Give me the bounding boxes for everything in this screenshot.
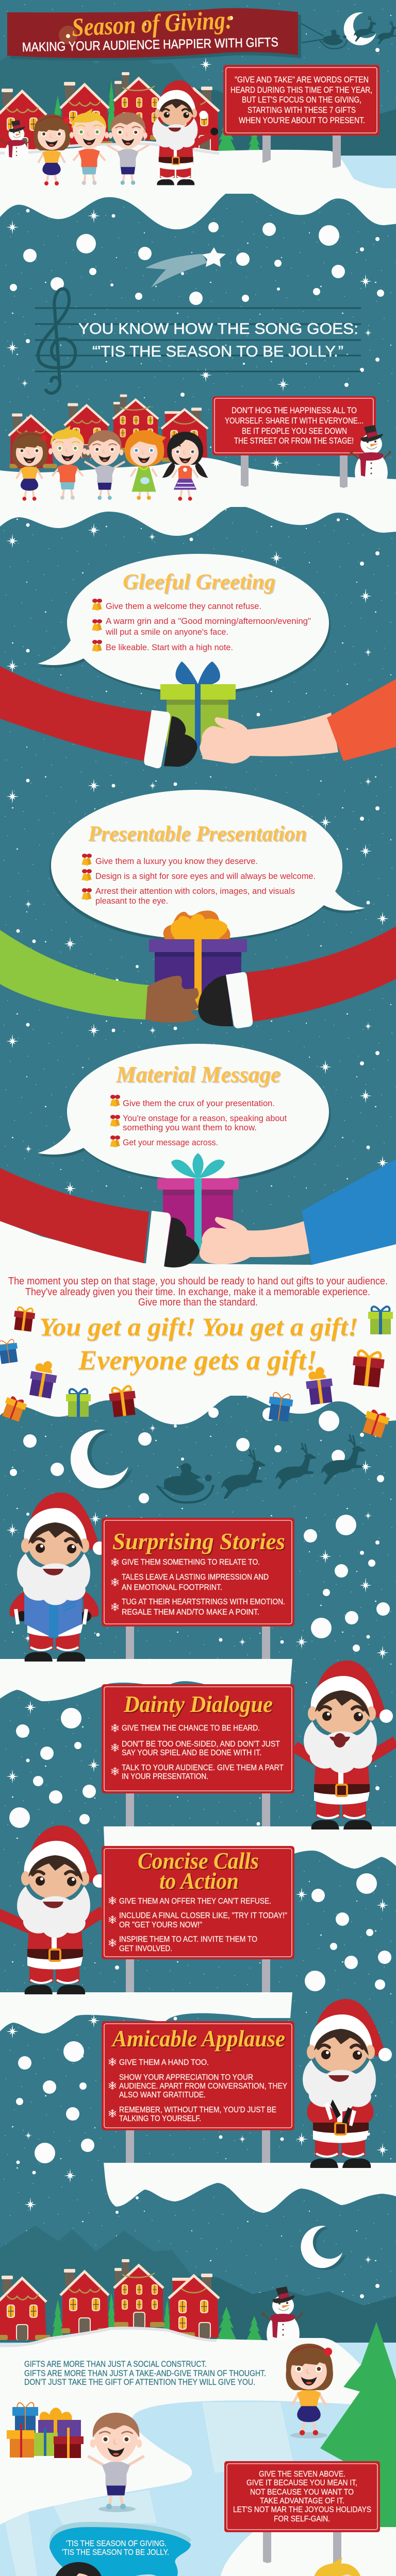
character: santa presenting sign — [0, 1825, 106, 1994]
bullet list: pleasant to the eye. — [95, 896, 168, 906]
heading: song quote: “'TIS THE SEASON TO BE JOLLY.” — [92, 343, 343, 360]
bullet list: will put a smile on anyone's face. — [105, 627, 228, 637]
sign text: "GIVE AND TAKE" ARE WORDS OFTEN — [235, 75, 369, 84]
bullet list — [109, 1896, 287, 1953]
sign text — [230, 75, 372, 125]
character: skating boy — [88, 2413, 144, 2512]
bullet list — [110, 1095, 287, 1147]
bullet list: GIVE THEM THE CHANCE TO BE HEARD. — [122, 1724, 260, 1733]
subtitle: MAKING YOUR AUDIENCE HAPPIER WITH GIFTS — [22, 35, 278, 55]
snowy ground — [0, 141, 396, 194]
mountains — [0, 2226, 396, 2344]
snow field — [0, 2327, 396, 2524]
icon: trees — [50, 80, 262, 155]
bullet list: TALK TO YOUR AUDIENCE. GIVE THEM A PART — [122, 1764, 284, 1772]
bullet list: Get your message across. — [123, 1138, 218, 1147]
text block: gifts are more: DON'T JUST TAKE THE GIFT OF ATTENTION THEY WILL GIVE YOU. — [24, 2377, 255, 2387]
icon: snowman — [261, 2286, 303, 2341]
heading: Presentable Presentation — [88, 822, 307, 846]
title: Season of Giving: Season of Giving: — [71, 5, 233, 42]
icon: trees — [51, 2293, 262, 2344]
heading: to Action — [159, 1868, 239, 1894]
bullet list: TUG AT THEIR HEARTSTRINGS WITH EMOTION. — [122, 1598, 285, 1606]
snow field — [0, 1221, 396, 1396]
signpost: give the seven above: TAKE ADVANTAGE OF IT. — [260, 2497, 344, 2505]
snow shadow under houses — [0, 144, 219, 154]
panel: surprising stories — [9, 1493, 294, 1662]
section: white snow band with gifts — [0, 1221, 396, 1425]
heading: Gleeful Greeting — [123, 570, 275, 594]
bullet list: You're onstage for a reason, speaking about — [123, 1113, 287, 1123]
icon: treble clef — [38, 289, 75, 393]
heading: song quote: YOU KNOW HOW THE SONG GOES: — [78, 320, 358, 337]
bullet list: Give them a luxury you know they deserve. — [95, 856, 258, 866]
text block: step on that stage — [8, 1276, 388, 1308]
icon: santa arm — [198, 926, 396, 1028]
sign text: BUT LET'S FOCUS ON THE GIVING, — [242, 95, 361, 105]
signpost: give the seven above: GIVE IT BECAUSE YOU MEAN IT, — [246, 2479, 357, 2487]
snow bank right — [221, 2526, 396, 2576]
section: closing skating scene — [0, 2226, 396, 2576]
posts — [126, 2130, 270, 2163]
bullet list: SHOW YOUR APPRECIATION TO YOUR — [119, 2073, 253, 2082]
heading: song quote — [78, 320, 358, 360]
posts — [126, 1626, 270, 1659]
sparkles — [59, 16, 233, 44]
icon: frozen lake edge — [335, 156, 396, 197]
heading: everyone gets a gift: Everyone gets a gift! — [78, 1345, 317, 1376]
bullet list: Arrest their attention with colors, images, and visuals — [95, 886, 295, 896]
icon: gift pile — [7, 2402, 84, 2458]
posts — [126, 1959, 270, 1992]
bullet list: A warm grin and a "Good morning/afternoon/evening" — [106, 616, 311, 626]
characters: opening group — [1, 80, 218, 185]
bullet list: GIVE THEM A HAND TOO. — [119, 2058, 209, 2067]
bullet list: DON'T BE TOO ONE-SIDED, AND DON'T JUST — [122, 1740, 280, 1749]
sign text: WHEN YOU'RE ABOUT TO PRESENT. — [239, 115, 365, 125]
signpost: give the seven above: GIVE THE SEVEN ABOVE. — [259, 2470, 345, 2479]
heading: Concise Calls — [138, 1848, 259, 1874]
icon: purple gift with gold bow — [149, 910, 247, 1010]
bullet list: GIVE THEM AN OFFER THEY CAN'T REFUSE. — [119, 1897, 271, 1906]
bullet list: Design is a sight for sore eyes and will always be welcome. — [95, 871, 316, 881]
signpost: give the seven above: NOT BECAUSE YOU WANT TO — [250, 2488, 354, 2497]
speech bubble: season of giving: 'TIS THE SEASON OF GIVING. — [66, 2539, 167, 2548]
character: blond boy — [70, 109, 109, 185]
icon: snowman — [1, 120, 31, 160]
mountains — [0, 39, 396, 157]
character: santa clapping hands — [303, 1999, 392, 2168]
icon: snowman — [350, 425, 391, 479]
character: girl with brown hair — [34, 114, 70, 185]
bullet list — [111, 1558, 285, 1617]
text block: gifts are more — [24, 2359, 266, 2387]
snow ledges behind the signs — [0, 1659, 396, 2213]
bullet list: Give them a welcome they cannot refuse. — [106, 601, 261, 611]
panel: concise calls to action — [0, 1825, 294, 1994]
bullet list: something you want them to know. — [123, 1123, 257, 1132]
signpost: don't hog the happiness: THE STREET OR FROM THE STAGE! — [234, 436, 354, 446]
bullet list: TALES LEAVE A LASTING IMPRESSION AND — [122, 1573, 269, 1582]
sign board — [102, 2021, 294, 2130]
character: blond boy — [310, 2557, 366, 2576]
icon: frozen pond — [0, 2343, 396, 2576]
icon: crescent moon — [301, 2226, 345, 2270]
panel: dainty dialogue — [102, 1660, 396, 1829]
bullet list: INSPIRE THEM TO ACT. INVITE THEM TO — [119, 1935, 257, 1944]
icon: child's hand and blue sleeve — [200, 1159, 396, 1265]
bullet list: ALSO WANT GRATITUDE. — [119, 2091, 206, 2099]
signpost: don't hog the happiness: YOURSELF. SHARE IT WITH EVERYONE... — [225, 416, 364, 426]
heading — [138, 1848, 259, 1894]
icon: village houses — [0, 72, 219, 154]
text block: gifts are more: GIFTS ARE MORE THAN JUST A SOCIAL CONSTRUCT. — [24, 2359, 207, 2369]
signpost: give the seven above: LET'S NOT MAR THE JOYOUS HOLIDAYS — [233, 2505, 371, 2514]
signpost: don't hog the happiness — [212, 396, 376, 488]
snowy ground — [0, 457, 396, 507]
character: skating girl — [286, 2344, 333, 2438]
heading: Surprising Stories — [112, 1528, 285, 1554]
speech bubble: season of giving — [50, 2522, 191, 2576]
heading: Amicable Applause — [111, 2025, 285, 2052]
snow drift edge — [0, 188, 396, 229]
bullet list — [109, 2058, 287, 2123]
character: santa with arms out — [294, 1660, 396, 1829]
bullet list — [81, 854, 316, 906]
bullet list: Be likeable. Start with a high note. — [106, 642, 233, 652]
section: carolers scene — [0, 395, 396, 536]
signpost: don't hog the happiness: BE IT PEOPLE YOU SEE DOWN — [242, 426, 347, 436]
bullet list: IN YOUR PRESENTATION. — [122, 1772, 208, 1781]
icons: scattered gifts — [0, 1307, 393, 1438]
panel: gleeful greeting speech bubble — [0, 554, 396, 768]
signpost: give the seven above — [224, 2461, 380, 2563]
icon: child's arm with brown hand and green sleeve — [0, 930, 199, 1023]
text block: gifts are more: GIFTS ARE MORE THAN JUST A TAKE-AND-GIVE TRAIN OF THOUGHT. — [24, 2368, 266, 2378]
panel: material message speech bubble — [0, 1044, 396, 1267]
sign board — [102, 1518, 294, 1626]
icon: houses — [9, 395, 208, 469]
panel: presentable presentation speech bubble — [0, 790, 396, 1028]
sign board — [102, 1684, 294, 1793]
moon and sleigh silhouette — [301, 12, 396, 48]
bullet list: AN EMOTIONAL FOOTPRINT. — [122, 1583, 222, 1592]
icon: houses — [0, 2259, 219, 2341]
icon: large fir tree — [320, 2322, 396, 2527]
character: brown haired boy — [107, 112, 149, 185]
snow shadow under houses — [0, 2328, 217, 2346]
icon: child's hand and orange sleeve — [200, 679, 396, 764]
posts — [126, 1793, 270, 1826]
icon: green gift with blue bow — [160, 662, 236, 749]
bullet list: TALKING TO YOURSELF. — [119, 2114, 201, 2123]
character: girl with black hair — [46, 2562, 111, 2576]
panel: amicable applause — [102, 1999, 392, 2168]
bullet list: GET INVOLVED. — [119, 1944, 172, 1953]
bullet list: INCLUDE A FINAL CLOSER LIKE, "TRY IT TODAY!" — [119, 1911, 287, 1920]
speech bubble: season of giving: 'TIS THE SEASON TO BE JOLLY. — [62, 2548, 169, 2557]
section: opening winter village scene — [0, 39, 396, 229]
icon: magenta gift with teal bow — [157, 1153, 239, 1249]
characters: five children — [12, 426, 208, 501]
bullet list: GIVE THEM SOMETHING TO RELATE TO. — [122, 1558, 260, 1567]
icon: santa arm — [0, 1168, 199, 1267]
bullet list: SAY YOUR SPIEL AND BE DONE WITH IT. — [122, 1749, 261, 1757]
bullet list: Give them the crux of your presentation. — [123, 1098, 275, 1108]
character: santa waving — [152, 80, 218, 185]
pond reflections — [5, 2402, 293, 2576]
heading: everyone gets a gift — [39, 1312, 358, 1376]
signpost: don't hog the happiness: DON'T HOG THE HAPPINESS ALL TO — [232, 405, 357, 415]
music staff with treble clef — [35, 289, 361, 393]
title banner — [7, 5, 301, 61]
sign board — [102, 1846, 294, 1959]
bullet list: OR "GET YOURS NOW!" — [119, 1921, 202, 1929]
signpost: give the seven above: FOR SELF-GAIN. — [274, 2515, 330, 2523]
bullet list — [92, 599, 311, 652]
bullet list: REGALE THEM AND/TO MAKE A POINT. — [122, 1608, 259, 1617]
character: santa reading a book — [9, 1493, 106, 1662]
bullet list — [111, 1724, 284, 1781]
shooting star — [145, 247, 226, 287]
text block: step on that stage: Give more than the standard. — [138, 1297, 258, 1308]
heading: everyone gets a gift: You get a gift! You get a gift! — [39, 1312, 358, 1341]
icon: santa arm offering gift — [0, 666, 197, 768]
snow drift edge — [0, 1394, 396, 1425]
snow drift edge — [0, 505, 396, 536]
sign text: STARTING WITH THESE 7 GIFTS — [248, 105, 356, 115]
heading: Dainty Dialogue — [123, 1691, 273, 1717]
bullet list: REMEMBER, WITHOUT THEM, YOU'D JUST BE — [119, 2106, 276, 2114]
signpost: give and take — [223, 65, 380, 168]
heading: Material Message — [116, 1062, 280, 1087]
bullet list: AUDIENCE. APART FROM CONVERSATION, THEY — [119, 2082, 287, 2091]
moon and reindeer team — [71, 1430, 365, 1502]
